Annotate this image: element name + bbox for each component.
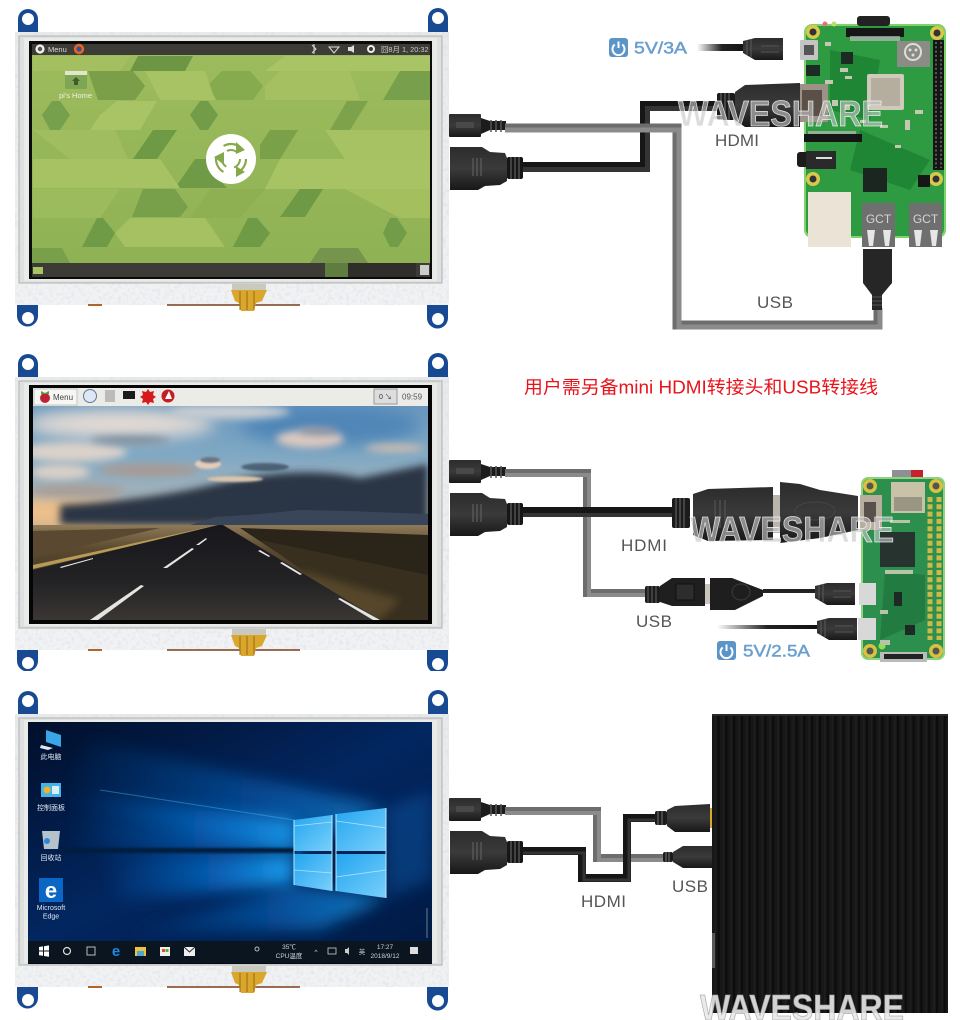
watermark: WAVESHARE (690, 509, 894, 550)
USB plug (663, 846, 712, 868)
Ethernet port (808, 192, 851, 247)
HDMI cable (523, 818, 657, 880)
panel: Raspberry Pi 3 setup (15, 8, 946, 328)
USB OTG adapter (645, 578, 855, 610)
power label: 5V/3A (634, 38, 688, 58)
HDMI cable (523, 512, 675, 515)
power icon (717, 641, 736, 660)
Raspberry Pi board (797, 16, 946, 310)
taskbar (28, 941, 432, 963)
red note: 用户需另备mini HDMI转接头和USB转接线 (524, 378, 878, 398)
taskbar: e (112, 943, 120, 960)
HDMI plug (717, 83, 800, 127)
LCD display with Windows 10 desktop (15, 690, 449, 1010)
Raspbian menu bar: 0 ↘ (379, 393, 392, 401)
Pi Zero board (858, 470, 945, 662)
desktop icons: Edge (43, 914, 59, 920)
taskbar: ^ (314, 949, 318, 956)
LCD display with Ubuntu MATE desktop (15, 8, 449, 328)
desktop folder icon: pi's Home (59, 91, 92, 100)
Raspbian menu bar: 09:59 (402, 392, 423, 402)
desktop icons: 控制面板 (37, 803, 65, 812)
mini HDMI adapter (773, 482, 858, 543)
LCD display with Raspbian desktop (0, 353, 460, 691)
power icon (609, 38, 628, 57)
power cable (717, 618, 857, 640)
scrollbar (426, 908, 428, 938)
wallpaper: green triangles (32, 55, 430, 263)
USB plug (863, 249, 892, 310)
taskbar: CPU温度 (276, 951, 303, 960)
cable connectors at LCD (449, 798, 523, 874)
photo: sky and road (33, 406, 428, 620)
Ubuntu MATE logo (206, 134, 256, 184)
top panel (32, 44, 430, 55)
desktop folder icon (59, 71, 92, 100)
USB label: USB (757, 293, 793, 312)
desktop icons (37, 730, 65, 920)
USB cable (505, 473, 648, 595)
Edge icon (39, 878, 63, 903)
HDMI cable (523, 106, 722, 170)
HDMI label: HDMI (581, 892, 626, 911)
cable connectors at LCD (449, 460, 523, 536)
watermark: WAVESHARE (678, 93, 883, 134)
taskbar: 35℃ (282, 943, 296, 951)
taskbar: 17:27 (377, 944, 394, 951)
Edge icon: e (45, 878, 57, 903)
USB ports: GCT (913, 212, 939, 226)
taskbar: 英 (359, 947, 366, 956)
bottom panel (32, 263, 430, 277)
desktop icons: 回收站 (40, 853, 62, 862)
Raspbian menu bar (33, 388, 428, 406)
power cable (697, 38, 783, 60)
desktop icons: 此电脑 (40, 752, 62, 761)
HDMI label: HDMI (621, 536, 667, 555)
USB cable (505, 128, 880, 327)
USB ports (862, 203, 942, 247)
USB label: USB (636, 612, 672, 631)
USB cable (505, 811, 665, 860)
Raspbian menu bar: Menu (53, 393, 73, 402)
panel: Raspberry Pi Zero setup (0, 353, 945, 691)
USB label: USB (672, 877, 708, 896)
HDMI plug (672, 487, 773, 541)
USB ports: GCT (866, 212, 892, 226)
desktop icons: Microsoft (37, 905, 65, 912)
top panel: Menu (48, 45, 67, 54)
cable connectors at LCD (449, 114, 523, 190)
taskbar: 2018/9/12 (371, 953, 400, 960)
HDMI label: HDMI (715, 131, 759, 150)
power label: 5V/2.5A (743, 642, 811, 660)
HDMI plug (655, 804, 712, 832)
top panel: 囧8月 1, 20:32 (381, 45, 429, 54)
mini PC (712, 714, 948, 1013)
panel: Windows PC setup (15, 690, 948, 1020)
Windows wallpaper (28, 722, 432, 941)
